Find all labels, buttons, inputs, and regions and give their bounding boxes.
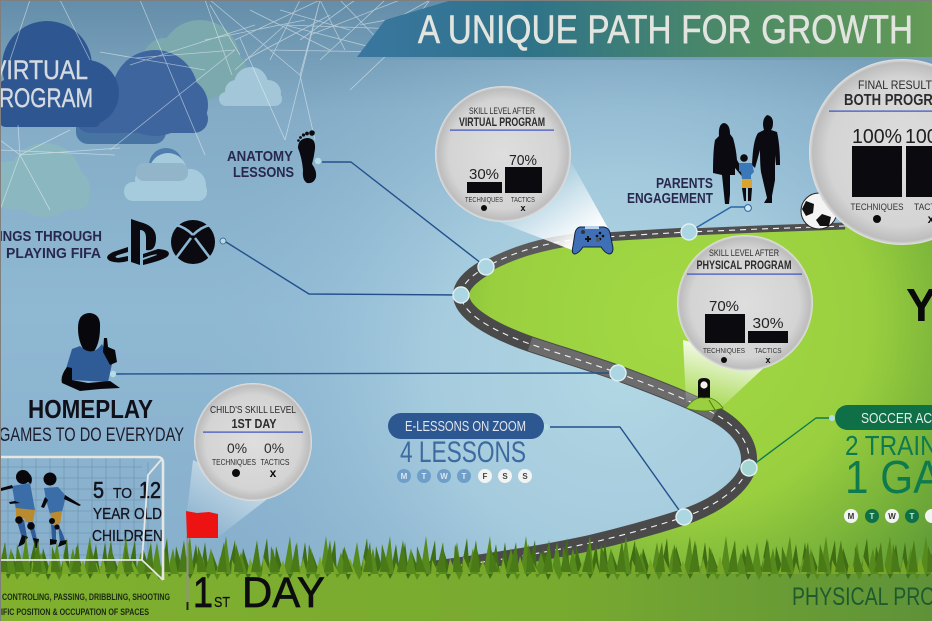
heading (696, 248, 792, 272)
bar chart: 100% (852, 126, 902, 148)
heading: PHYSICAL PROGRAM (696, 258, 792, 272)
parents engagement label (627, 175, 713, 207)
bar chart: 70% (509, 152, 537, 169)
bar chart: TECHNIQUES (703, 348, 745, 355)
score values: TECHNIQUES (212, 458, 256, 467)
four lessons: 4 LESSONS (400, 436, 526, 469)
fifa label: INGS THROUGH (0, 228, 102, 245)
goal frame (0, 457, 163, 580)
weekday dots virtual: T (422, 472, 427, 481)
cloud: blue middle (76, 50, 208, 136)
bar chart: TACTICS (511, 197, 535, 204)
fifa label (0, 228, 102, 262)
score values: TACTICS (260, 458, 290, 467)
bubble: child's skill level first day (194, 383, 312, 501)
homeplay subheading: GAMES TO DO EVERYDAY (0, 424, 184, 446)
weekday dots virtual: T (462, 472, 467, 481)
score values: x (270, 466, 277, 480)
weekday dots virtual: S (522, 472, 528, 481)
skills footnote: CONTROLING, PASSING, DRIBBLING, SHOOTING (2, 592, 170, 602)
anatomy lessons label: LESSONS (233, 164, 294, 181)
first day heading: DAY (242, 569, 325, 617)
spotlight: virtual program (499, 160, 608, 250)
age label (92, 477, 163, 545)
child player one (1, 470, 39, 548)
heading: VIRTUAL PROGRAM (459, 115, 545, 129)
spotlight: first day (187, 460, 270, 537)
icon: xbox logo (171, 220, 215, 264)
age label: 5 (93, 477, 104, 503)
bar chart: TACTICS (754, 348, 782, 355)
e-lessons pill: E-LESSONS ON ZOOM (405, 418, 526, 435)
weekday dots virtual: F (483, 472, 488, 481)
weekday dots physical: W (888, 512, 896, 521)
skills footnote (1, 592, 170, 617)
flag (186, 511, 218, 610)
cloud: pale green back (143, 20, 247, 100)
anatomy lessons label (227, 148, 294, 181)
icon: parents and child (713, 115, 780, 204)
virtual program label (0, 55, 93, 113)
weekday dots virtual (397, 469, 532, 483)
age label: YEAR OLD (93, 506, 162, 523)
heading (210, 404, 296, 431)
connector end dots (110, 158, 835, 430)
weekday dots virtual: S (502, 472, 508, 481)
cloud: grey overlap (136, 163, 188, 181)
spotlight: physical program (683, 340, 770, 407)
icon: training cone (686, 378, 723, 411)
green field (390, 224, 932, 574)
goal net (0, 458, 148, 560)
road nodes (453, 224, 757, 525)
age label: CHILDREN (92, 528, 163, 545)
parents engagement label: PARENTS (656, 175, 713, 192)
skills footnote: IFIC POSITION & OCCUPATION OF SPACES (1, 607, 149, 617)
bar chart: TECHNIQUES (850, 202, 904, 212)
bubble: final result (809, 59, 932, 245)
first day heading (193, 569, 325, 617)
score values: 0% (227, 440, 247, 456)
network lines decoration (0, 0, 450, 210)
goal with children (0, 458, 163, 560)
bar chart: x (765, 355, 771, 365)
title: A UNIQUE PATH FOR GROWTH (418, 7, 913, 52)
cloud: pale lower (124, 153, 207, 201)
grass (0, 530, 932, 582)
e-lessons pill (388, 413, 544, 439)
cloud: virtual program (0, 21, 119, 127)
heading: CHILD'S SKILL LEVEL (210, 404, 296, 416)
father (752, 115, 780, 203)
icon: playstation logo (107, 219, 169, 265)
age label: TO (113, 485, 132, 502)
heading: 1ST DAY (232, 416, 277, 431)
bar chart: TECHNIQUES (465, 197, 503, 204)
weekday dots virtual: W (440, 472, 448, 481)
heading: SKILL LEVEL AFTER (469, 106, 535, 117)
bar chart (465, 152, 542, 213)
bar chart: 30% (752, 315, 784, 332)
icon: child doing homeplay (62, 313, 120, 391)
weekday dots physical: T (870, 512, 875, 521)
anatomy lessons label: ANATOMY (227, 148, 293, 165)
icon: controller (572, 226, 613, 254)
bar chart (850, 126, 932, 226)
fifa label: PLAYING FIFA (6, 245, 101, 262)
heading (459, 106, 545, 129)
homeplay heading: HOMEPLAY (28, 394, 153, 424)
ground (0, 566, 932, 621)
mother (713, 123, 747, 204)
weekday dots virtual: M (401, 472, 408, 481)
score values: 0% (264, 440, 284, 456)
heading (844, 80, 932, 105)
title banner (357, 0, 932, 57)
connector lines (116, 162, 830, 517)
light glow behind road (200, 60, 932, 580)
score values (212, 440, 290, 480)
bar chart (703, 298, 788, 365)
bar chart: x (520, 203, 526, 213)
weekday dots physical: T (910, 512, 915, 521)
cloud: small pale top (219, 67, 282, 106)
heading: SKILL LEVEL AFTER (709, 248, 779, 259)
first day heading: 1 (193, 569, 213, 617)
bar chart: 30% (469, 166, 499, 183)
bubble: physical program skill (677, 235, 813, 371)
road (390, 226, 845, 574)
soccer academy pill (835, 405, 932, 430)
child (739, 154, 754, 201)
bar chart: 70% (709, 298, 739, 315)
first day heading: ST (214, 594, 230, 611)
bubble: virtual program skill (435, 86, 571, 222)
parents engagement label: ENGAGEMENT (627, 190, 713, 207)
icon: soccer ball (801, 193, 837, 229)
weekday dots physical: M (848, 512, 855, 521)
cloud: dark small behind (149, 148, 183, 182)
child player two (41, 472, 81, 547)
cloud: lower left (0, 143, 90, 217)
cloud: blue back (76, 105, 166, 144)
age label: 12 (139, 477, 161, 503)
weekday dots physical (844, 509, 932, 523)
icon: foot (297, 130, 316, 183)
